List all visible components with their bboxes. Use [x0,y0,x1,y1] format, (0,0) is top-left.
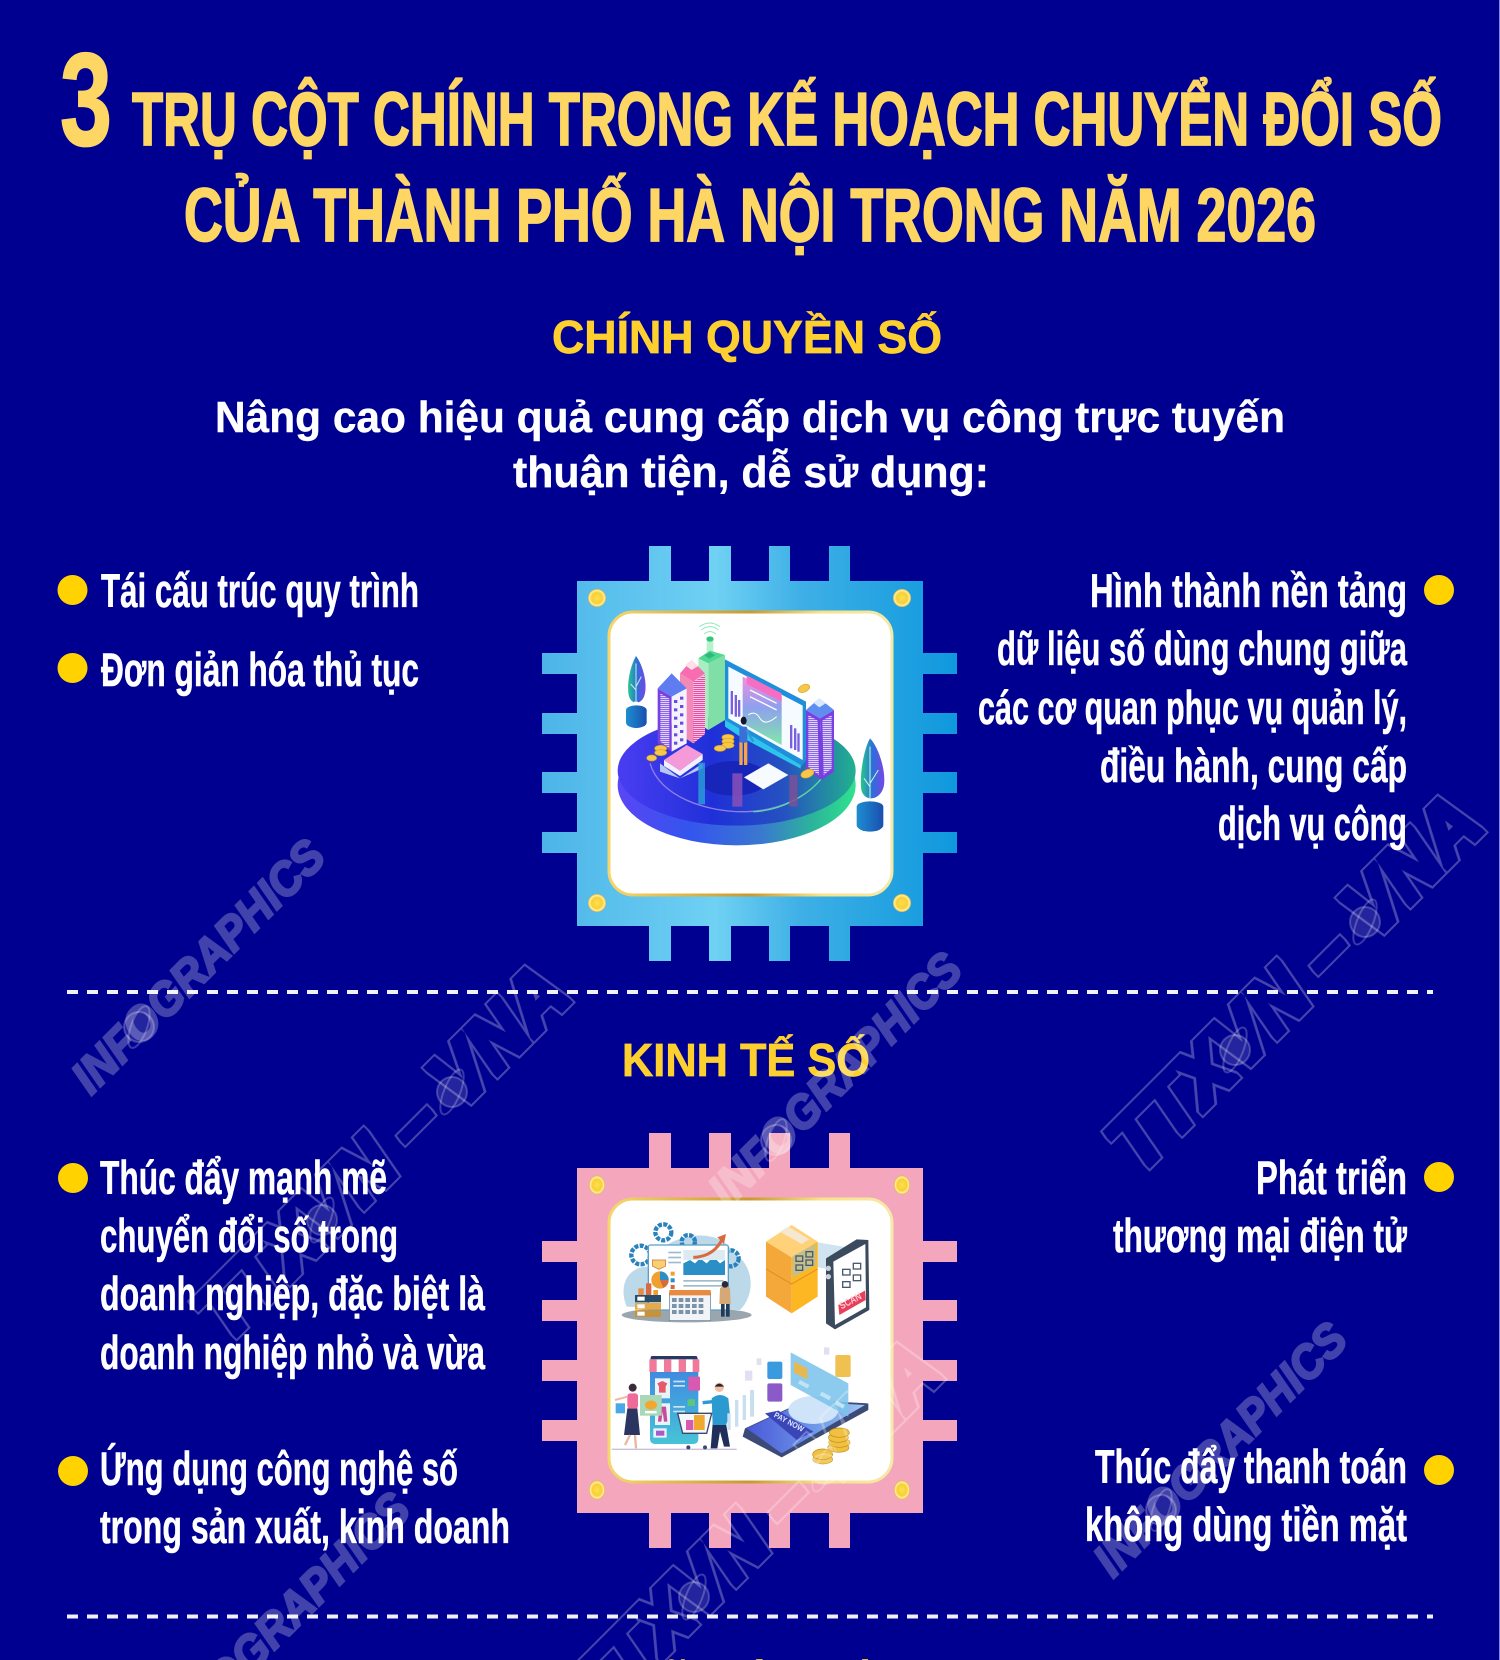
divider 2 [67,1614,1433,1618]
tower 2 pink [680,660,705,743]
icon: blue chip with smart city [542,546,957,961]
illustrations: digital economy [612,1224,869,1464]
bullet [1424,1455,1454,1485]
title numeral: 3 [60,26,112,173]
online shop [612,1356,737,1449]
chip window [609,1199,892,1482]
item text [1113,1151,1408,1262]
watermark globe [124,1004,154,1050]
item: Đơn giản hóa thủ tục [101,643,419,696]
paper [744,763,788,789]
chip screws [588,589,911,912]
item text: chuyển đổi số trong [100,1209,398,1262]
chip window [609,612,892,895]
chip screws [589,1176,910,1500]
item: Tái cấu trúc quy trình [101,564,419,617]
item text: Thúc đẩy mạnh mẽ [100,1151,387,1204]
tower 3 green [698,623,725,730]
boxes and scanning phone [766,1225,869,1329]
intro text: Nâng cao hiệu quả cung cấp dịch vụ công trực tuyến [215,393,1285,442]
chip body [542,546,957,961]
watermark globes [306,1067,468,1245]
item text: Ứng dụng công nghệ số [100,1442,458,1495]
watermark globes [678,1444,840,1622]
item text [1085,1440,1407,1551]
watermark: INFOGRAPHICS 1: INFOGRAPHICS [61,829,335,1103]
watermark: INFOGRAPHICS 2: INFOGRAPHICS [698,942,972,1216]
bullet [58,1163,88,1193]
watermark globe [761,1117,791,1163]
heading: Chính quyền số: CHÍNH QUYỀN SỐ [552,311,942,363]
bullet [58,1456,88,1486]
bullet [58,653,88,683]
item text [100,1442,510,1553]
right plant [857,738,884,832]
left plant [626,656,647,728]
list: section 1 right [978,564,1454,850]
item text [978,564,1408,850]
intro text: thuận tiện, dễ sử dụng: [513,447,989,497]
heading: Kinh tế số: KINH TẾ SỐ [622,1034,870,1086]
monitor [725,659,806,769]
coins [647,682,815,780]
tower 4 right [806,698,834,780]
list: section 2 right [1085,1151,1454,1551]
item text: Phát triển [1256,1151,1407,1204]
chip body [542,1133,957,1548]
watermark globes [1219,897,1381,1075]
icon: pink chip with digital economy [542,1133,957,1548]
watermark globe [1146,1487,1176,1533]
tower 1 purple [658,673,687,752]
illustration: isometric city [618,623,884,845]
item text: dịch vụ công [1218,797,1407,850]
bullet [58,575,88,605]
bullet [1424,1162,1454,1192]
watermark: TTXVN VNA 2: TTXVN – VNA [176,948,586,1357]
item text [100,1151,486,1379]
list: section 2 left [58,1151,510,1553]
bullet [1424,575,1454,605]
mobile payment: PAY NOW [772,1410,806,1434]
title [60,26,1442,257]
list: section 1 left [58,564,419,696]
intro text [215,393,1285,497]
person [739,717,753,765]
watermark: INFOGRAPHICS 3: INFOGRAPHICS [1083,1312,1357,1586]
boxes and scanning phone: SCAN [838,1291,864,1312]
mobile payment [727,1347,868,1464]
item text: doanh nghiệp nhỏ và vừa [100,1326,486,1379]
pillars [698,763,798,807]
business analytics [622,1224,752,1322]
item text: trong sản xuất, kinh doanh [100,1500,510,1553]
divider 1 [67,990,1433,994]
item text: doanh nghiệp, đặc biệt là [100,1267,486,1320]
books [660,745,703,778]
